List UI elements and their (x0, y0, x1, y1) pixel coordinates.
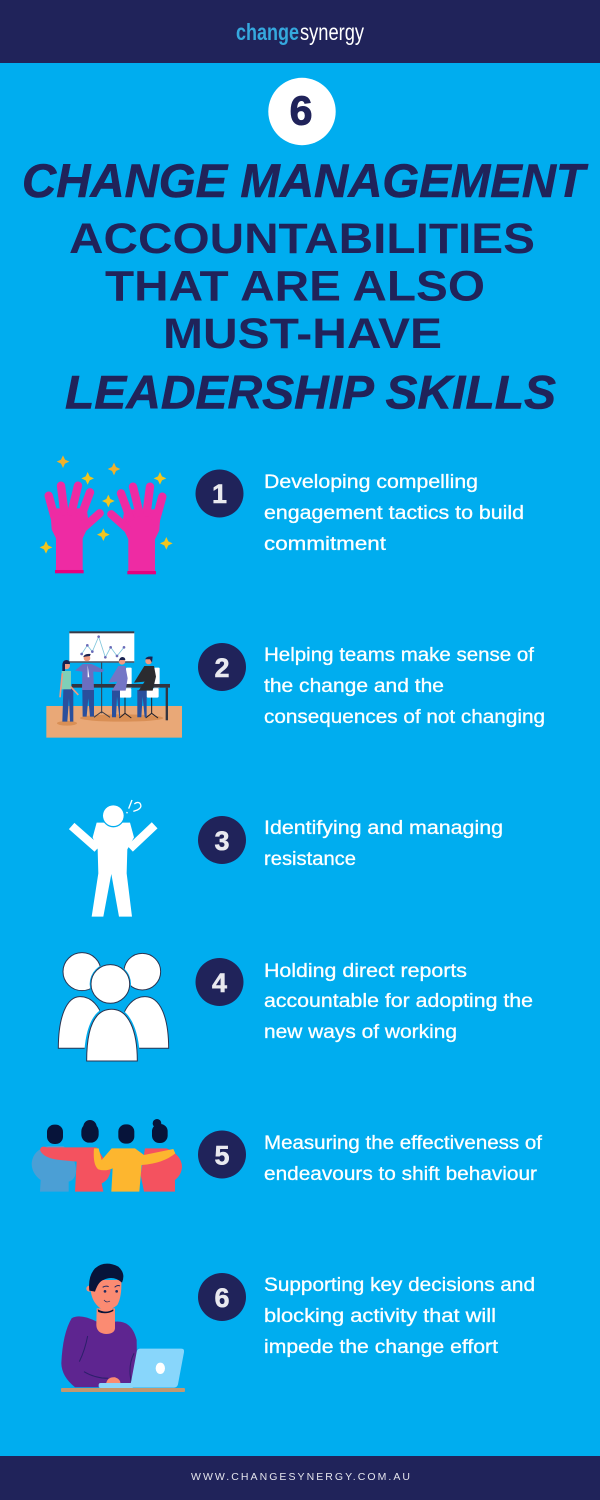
number badge 6: 6 (214, 1283, 230, 1313)
text: item 4: new ways of working (264, 1022, 457, 1043)
icon: confused person (72, 800, 155, 917)
icon: team meeting (46, 631, 182, 738)
title (22, 154, 589, 418)
text: item 2: Helping teams make sense of (264, 645, 535, 666)
icon: gloves with sparkles (40, 455, 173, 574)
number badge 1 (196, 470, 244, 518)
title: MUST-HAVE (163, 310, 442, 358)
text: item 6: blocking activity that will (264, 1306, 496, 1327)
text: item 6: impede the change effort (264, 1337, 499, 1358)
text: item 1 (264, 472, 524, 555)
text: item 6 (264, 1275, 535, 1358)
text: item 4: Holding direct reports (264, 961, 467, 982)
number badge 1: 1 (212, 479, 227, 509)
number badge 2 (198, 643, 246, 691)
number badge 3: 3 (214, 826, 230, 856)
title: CHANGE MANAGEMENT (22, 154, 589, 207)
text: item 1: commitment (264, 534, 387, 555)
number badge 5: 5 (214, 1140, 230, 1170)
title: ACCOUNTABILITIES (69, 215, 535, 263)
text: item 4: accountable for adopting the (264, 991, 533, 1012)
number badge 6 (198, 1273, 246, 1321)
icon: team embracing (32, 1119, 182, 1192)
text: item 5 (264, 1133, 543, 1185)
text: item 3 (264, 818, 503, 870)
text: item 2 (264, 645, 545, 728)
text: item 5: endeavours to shift behaviour (264, 1164, 538, 1185)
text: item 2: the change and the (264, 676, 444, 697)
number badge 4 (196, 958, 244, 1006)
footer band with website: WWW.CHANGESYNERGY.COM.AU (191, 1471, 410, 1483)
title: THAT ARE ALSO (105, 262, 485, 310)
icon: person at laptop (61, 1264, 185, 1392)
text: item 2: consequences of not changing (264, 707, 545, 728)
number badge 2: 2 (214, 653, 230, 683)
header band with logo: synergy (300, 19, 364, 45)
text: item 1: Developing compelling (264, 472, 478, 493)
number badge 5 (198, 1130, 246, 1178)
badge: number 6: 6 (290, 88, 312, 134)
text: item 5: Measuring the effectiveness of (264, 1133, 543, 1154)
badge: number 6 (268, 78, 336, 145)
title: LEADERSHIP SKILLS (65, 366, 556, 418)
number badge 4: 4 (212, 968, 227, 998)
text: item 3: Identifying and managing (264, 818, 503, 839)
icon: group of people (58, 953, 169, 1063)
text: item 1: engagement tactics to build (264, 503, 524, 524)
text: item 4 (264, 961, 533, 1043)
footer band with website (0, 1456, 600, 1500)
number badge 3 (198, 816, 246, 864)
header band with logo: change (236, 19, 299, 45)
header band with logo (0, 0, 600, 63)
text: item 6: Supporting key decisions and (264, 1275, 535, 1296)
text: item 3: resistance (264, 849, 356, 870)
